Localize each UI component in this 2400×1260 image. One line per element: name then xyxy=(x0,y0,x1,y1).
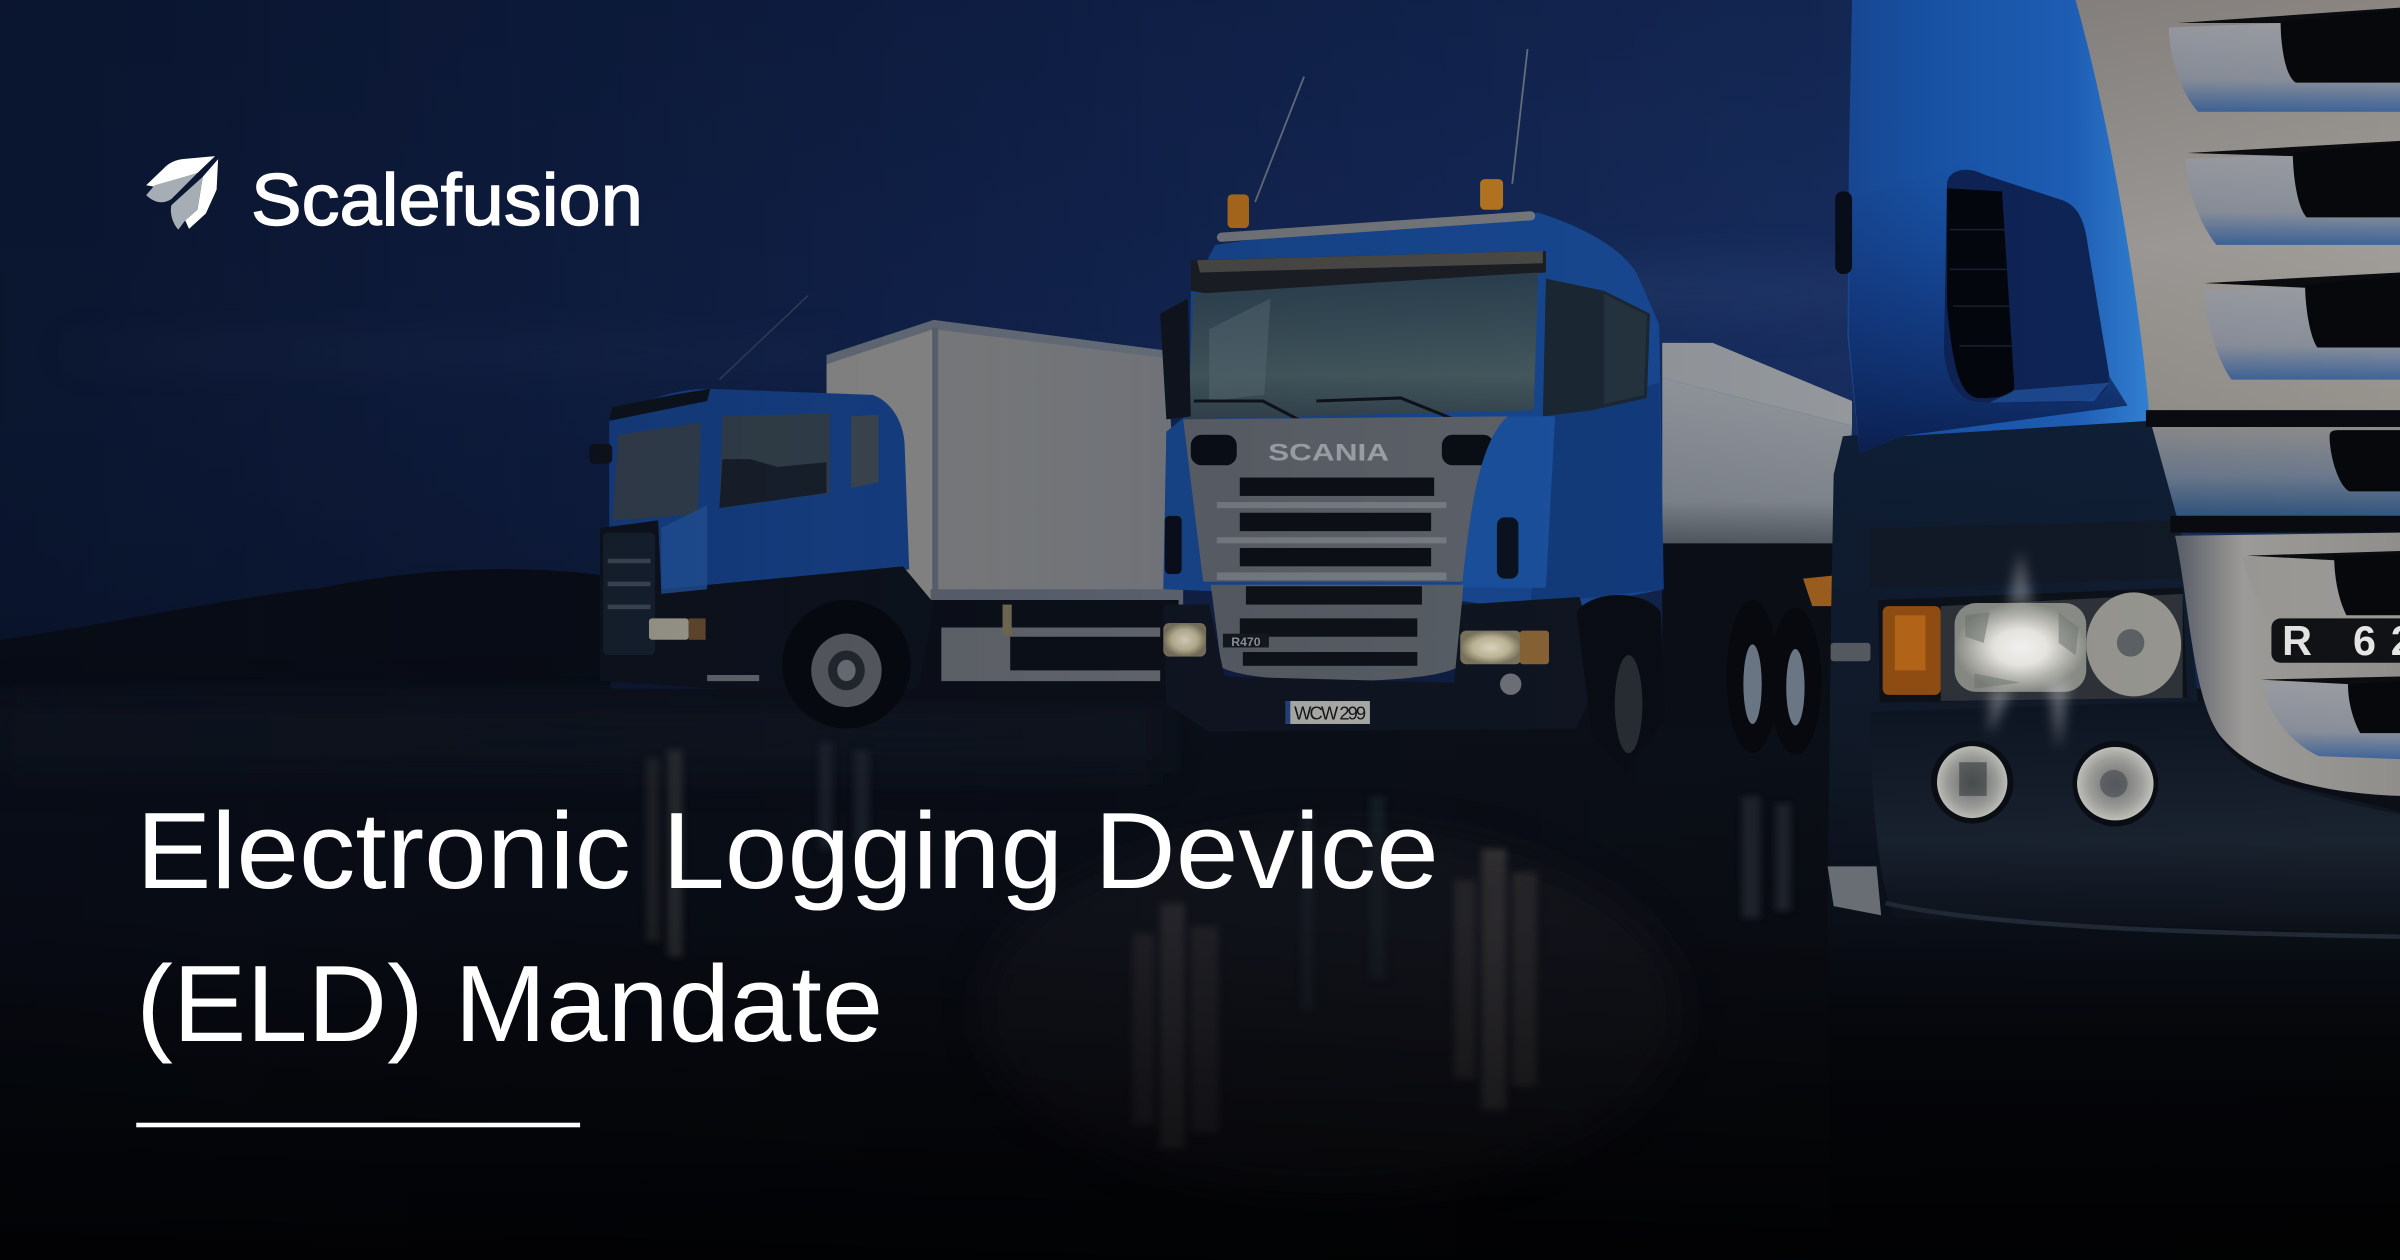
lower dark body xyxy=(1828,410,2400,1260)
antennas xyxy=(1255,49,1528,202)
horizon hill xyxy=(0,569,612,719)
bumper fold xyxy=(1870,520,2181,589)
cargo box xyxy=(827,320,1183,605)
rear wheels xyxy=(1727,600,1821,755)
headlight unit xyxy=(1878,588,2187,703)
upper slot 1 xyxy=(2169,8,2400,112)
model badge xyxy=(1223,634,1269,649)
left headlight xyxy=(1163,623,1206,657)
logo xyxy=(146,156,643,241)
blue left panel xyxy=(1165,422,1203,582)
grey grille upper xyxy=(2074,0,2400,410)
lower grille xyxy=(2175,533,2400,796)
underline rule xyxy=(136,1123,580,1127)
model badge: R470 xyxy=(1231,635,1261,649)
front wheel xyxy=(1577,595,1665,773)
middle band xyxy=(2152,427,2400,516)
title xyxy=(136,791,1439,1065)
fog light xyxy=(1500,673,1521,695)
left beacon xyxy=(1228,194,1249,228)
dark front lower xyxy=(600,520,934,689)
front grille xyxy=(603,533,655,655)
side windows xyxy=(719,413,879,508)
mirror arm xyxy=(1835,191,1852,274)
left truck xyxy=(589,295,1183,729)
side windows xyxy=(1543,279,1650,416)
bumper seam xyxy=(1886,903,2400,937)
mirror xyxy=(589,444,612,464)
wet ground xyxy=(0,689,2400,1260)
front wheel xyxy=(782,600,911,729)
roof visor xyxy=(609,389,710,421)
licence plate: WCW 299 xyxy=(1294,702,1366,723)
lower grille xyxy=(1211,585,1463,681)
door shade xyxy=(1531,383,1664,605)
wipers xyxy=(1194,398,1454,422)
black seam xyxy=(2170,516,2400,533)
bumper xyxy=(1163,597,1599,732)
large foreground truck xyxy=(1828,0,2400,1260)
air vent xyxy=(1944,170,2109,403)
roof bar xyxy=(1221,216,1531,237)
upper slot 3 xyxy=(2204,272,2400,380)
background sky xyxy=(0,0,2400,719)
title line 2: (ELD) Mandate xyxy=(136,944,883,1065)
blue highlight xyxy=(661,505,707,594)
cab body xyxy=(1163,213,1664,612)
black seam xyxy=(2146,410,2400,427)
brand name: SCANIA xyxy=(1268,441,1389,467)
fog lights xyxy=(1931,741,2158,827)
turn signal bar xyxy=(1831,643,1870,661)
front step xyxy=(1828,866,1881,915)
headlight glow xyxy=(1990,551,2069,750)
logo icon xyxy=(146,156,218,230)
tipper trailer xyxy=(1662,343,1852,727)
step xyxy=(707,675,759,681)
headlight xyxy=(649,618,706,640)
windshield xyxy=(1188,272,1538,419)
mirror xyxy=(1160,298,1191,419)
upper slot 2 xyxy=(2186,141,2400,245)
chassis and side skirt xyxy=(719,600,1179,701)
blue cab panel xyxy=(1847,0,2149,453)
right headlight xyxy=(1460,631,1549,664)
centre truck xyxy=(1160,49,1852,773)
right beacon xyxy=(1480,179,1503,210)
blue right fender xyxy=(1462,416,1555,588)
title line 1: Electronic Logging Device xyxy=(136,791,1439,912)
cab body xyxy=(609,389,909,594)
bumper xyxy=(1870,701,2400,934)
windshield xyxy=(612,422,701,520)
blue panel lower shade xyxy=(1849,161,2128,453)
sun visor xyxy=(1191,251,1546,294)
front grille xyxy=(1183,416,1508,582)
antenna xyxy=(719,295,808,380)
logo wordmark: Scalefusion xyxy=(251,158,643,241)
